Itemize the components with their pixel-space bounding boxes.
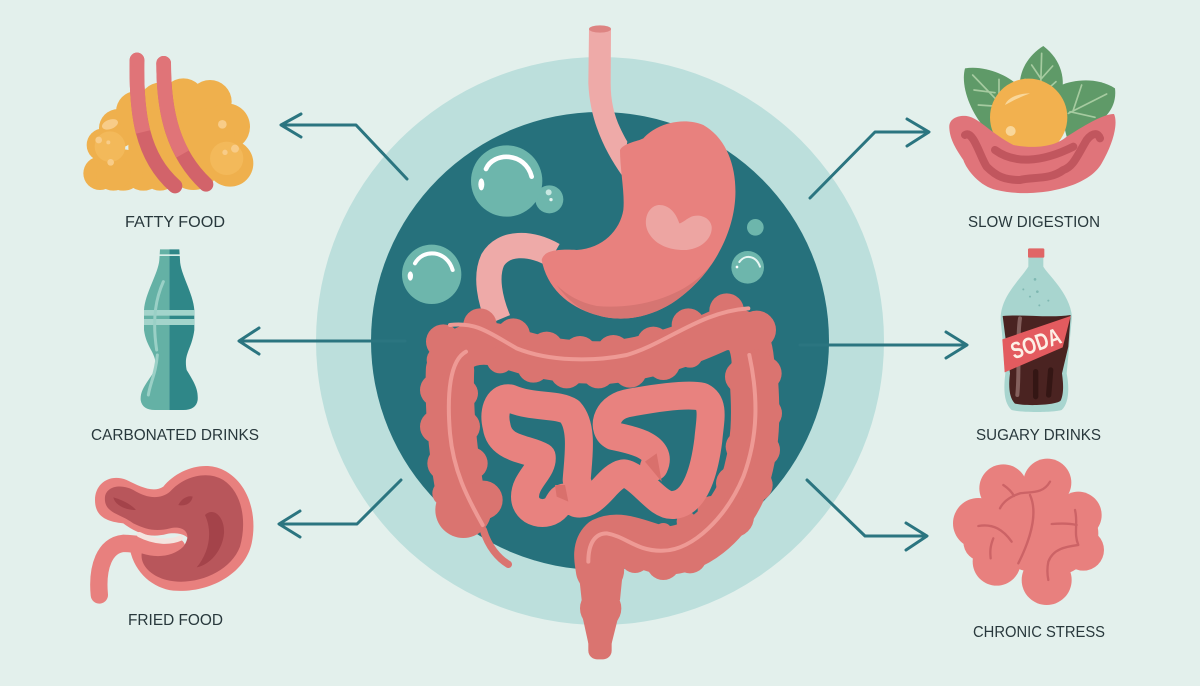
leaves <box>964 46 1115 137</box>
inner dark <box>105 475 243 582</box>
side and lower colon tube <box>450 370 755 570</box>
bowl <box>949 114 1116 193</box>
bottle left half <box>141 249 169 410</box>
appendix <box>483 530 508 564</box>
bowl inner folds <box>965 134 1100 180</box>
arrow: to sugary drinks <box>800 332 967 358</box>
inner teal circle <box>371 112 829 570</box>
label: sugary drinks: SUGARY DRINKS <box>976 427 1101 444</box>
arrow: to slow digestion <box>810 119 929 198</box>
small bubble right top <box>747 219 764 236</box>
label: carbonated drinks: CARBONATED DRINKS <box>91 427 259 444</box>
shell bubbles <box>1022 278 1049 306</box>
icon: fried food stomach <box>95 466 253 595</box>
arrow: to chronic stress <box>807 480 927 550</box>
arrow: to carbonated drinks <box>239 328 405 354</box>
small intestine <box>495 396 711 513</box>
icon: chronic stress brain <box>953 459 1104 605</box>
leaf veins <box>973 53 1107 117</box>
label: fatty food: FATTY FOOD <box>125 214 225 231</box>
outer pale circle <box>316 57 884 625</box>
fruit <box>990 79 1067 156</box>
arrow: to fatty food <box>281 114 407 179</box>
label: slow digestion: SLOW DIGESTION <box>968 214 1100 231</box>
esophagus <box>588 25 627 175</box>
label band <box>1002 316 1071 372</box>
bottle cap <box>1028 248 1044 258</box>
pale colon lines <box>449 308 755 562</box>
icon: fatty food <box>83 53 253 191</box>
fat blob <box>83 78 253 191</box>
left bubble <box>402 245 461 304</box>
outer body <box>95 466 253 591</box>
label: fried food: FRIED FOOD <box>128 612 223 629</box>
bottle shell <box>1001 257 1072 412</box>
bottle highlights <box>148 282 163 395</box>
small bubble right <box>731 251 764 284</box>
bottle bands <box>144 254 194 325</box>
label band: SODA <box>1007 323 1065 364</box>
tail <box>99 543 177 595</box>
pale gap <box>139 535 181 541</box>
darker spots <box>113 496 224 567</box>
meat strips <box>130 53 206 186</box>
duodenum <box>489 246 553 320</box>
icon: carbonated bottle <box>141 249 198 410</box>
stomach body <box>542 121 735 319</box>
bottle right half <box>169 249 198 410</box>
cola shading <box>1017 318 1051 397</box>
icon: soda bottle <box>1001 248 1072 412</box>
rectum <box>577 553 623 659</box>
transverse colon tube <box>450 329 753 373</box>
colon lobes <box>420 293 782 629</box>
bubbles <box>402 145 764 304</box>
stomach group <box>489 25 735 320</box>
large intestine and small intestine <box>420 293 782 659</box>
brain creases <box>978 482 1078 580</box>
label: chronic stress: CHRONIC STRESS <box>973 624 1105 641</box>
arrow: to fried food <box>279 480 401 537</box>
icon: slow digestion <box>949 46 1116 193</box>
cola <box>1003 315 1071 405</box>
large bubble with small satellite <box>471 145 563 217</box>
brain lobes <box>953 459 1104 605</box>
large intestine <box>420 293 782 659</box>
